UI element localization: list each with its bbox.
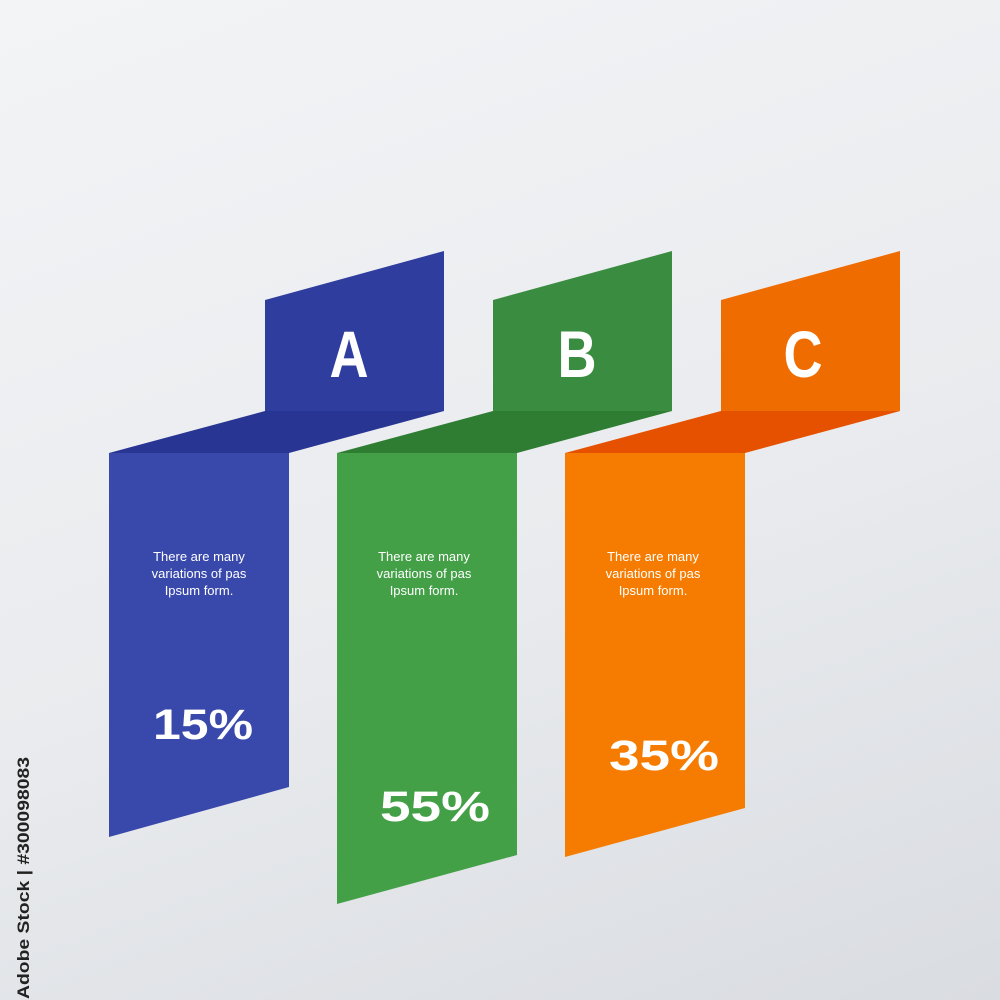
text C: Ipsum form. xyxy=(619,583,687,598)
text C: There are many xyxy=(607,549,699,564)
text C: variations of pas xyxy=(606,566,701,581)
text B: There are many xyxy=(378,549,470,564)
letter C: C xyxy=(783,317,823,391)
text A: There are many xyxy=(153,549,245,564)
stock id vertical text: Adobe Stock | #300098083 xyxy=(14,757,33,999)
text A: Ipsum form. xyxy=(165,583,233,598)
value 35%: 35% xyxy=(609,732,719,780)
text B: Ipsum form. xyxy=(390,583,458,598)
value 15%: 15% xyxy=(153,701,253,749)
panel C xyxy=(565,251,900,857)
value 55%: 55% xyxy=(380,783,490,831)
text B: variations of pas xyxy=(377,566,472,581)
letter A: A xyxy=(329,317,369,391)
letter B: B xyxy=(557,317,597,391)
panel B xyxy=(337,251,672,904)
panel A xyxy=(109,251,444,837)
text A: variations of pas xyxy=(152,566,247,581)
